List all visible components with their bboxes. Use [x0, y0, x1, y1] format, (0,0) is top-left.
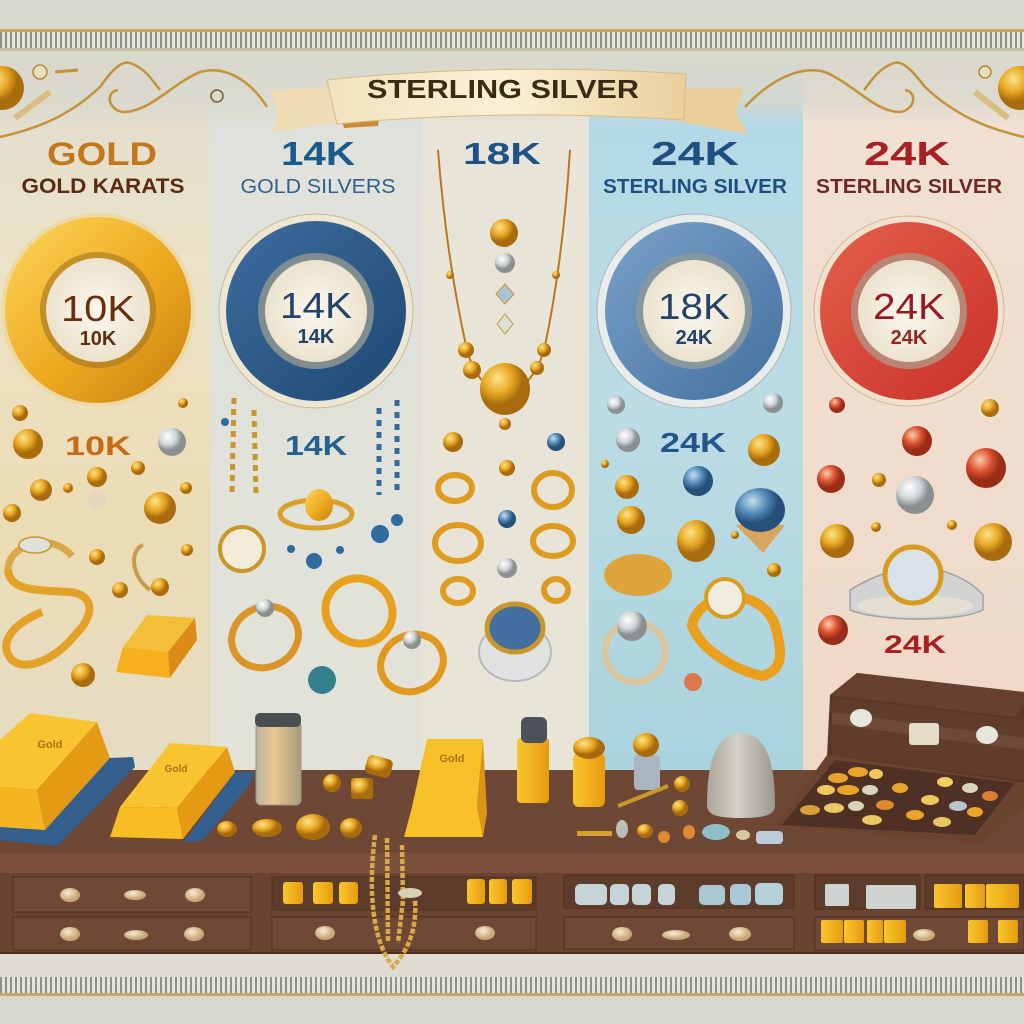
- heading: column 2: GOLD SILVERS: [240, 176, 396, 198]
- necklace: [438, 150, 570, 430]
- badge: 24K: [814, 216, 1004, 406]
- heading: column 4: STERLING SILVER: [603, 176, 788, 198]
- label: 10K: 10K: [65, 431, 132, 461]
- heading: column 1: [22, 136, 184, 198]
- badge: 14K: 14K: [298, 326, 335, 348]
- panel: column backgrounds: [0, 50, 1024, 770]
- heading: column 1: GOLD: [47, 136, 157, 172]
- gold bar: second: Gold: [165, 764, 187, 775]
- gold bar: center: Gold: [439, 753, 465, 765]
- small gems on counter: [577, 776, 783, 844]
- heading: column 1: GOLD KARATS: [22, 175, 184, 198]
- heading: column 3: 18K: [463, 136, 542, 171]
- badge: 18K 24K: 24K: [676, 327, 713, 349]
- jewelry: column 4: [598, 393, 785, 691]
- badge: 18K 24K: 18K: [658, 286, 730, 327]
- gold bar: second: [110, 743, 255, 843]
- gold bar: left: Gold: [37, 739, 63, 751]
- jewelry: column 2: [220, 398, 453, 702]
- counter: display shelf: [0, 770, 1024, 954]
- label: column 5 24K: 24K: [884, 631, 946, 659]
- hanging chain: [372, 835, 422, 967]
- heading: column 2: [240, 135, 396, 198]
- jewelry case: [777, 673, 1024, 843]
- jewelry: column 5: [817, 397, 1012, 645]
- heading: column 5: [816, 135, 1003, 198]
- label: column 4 24K: 24K: [660, 427, 726, 458]
- badge: 24K: 24K: [891, 327, 928, 349]
- jewelry: column 3: [435, 432, 573, 681]
- badge: 10K: [1, 213, 195, 407]
- drawers: far right: [815, 875, 1024, 950]
- heading: column 4: [603, 135, 788, 198]
- gold nuggets on counter: [217, 754, 394, 840]
- heading: column 5: 24K: [864, 135, 950, 172]
- jewelry: column 1: [3, 398, 197, 687]
- label: 14K: 14K: [285, 430, 347, 461]
- gold bar: left: [0, 713, 135, 846]
- gold bar: center: [404, 739, 487, 837]
- badge: 10K: 10K: [80, 328, 117, 350]
- badge: 18K 24K: [597, 214, 791, 408]
- bottles: [517, 717, 660, 807]
- bottom frame band: [0, 954, 1024, 996]
- silver dome: [707, 733, 775, 818]
- icon: right ornament: [745, 62, 1024, 137]
- banner: sterling silver: [270, 69, 748, 134]
- drawers: right: [564, 875, 794, 949]
- drawers: left: [13, 877, 251, 950]
- badge: 14K: [219, 214, 413, 408]
- badge: 14K: 14K: [280, 285, 352, 326]
- icon: left ornament: [0, 62, 267, 137]
- heading: column 4: 24K: [651, 135, 739, 172]
- top frame band: [0, 29, 1024, 51]
- heading: column 5: STERLING SILVER: [816, 176, 1003, 198]
- badge: 24K: 24K: [873, 286, 945, 327]
- heading: column 2: 14K: [281, 135, 355, 172]
- drawers: center: [272, 877, 536, 950]
- jar: silver: [255, 713, 301, 805]
- banner: sterling silver: STERLING SILVER: [367, 74, 639, 104]
- badge: 10K: 10K: [61, 288, 135, 329]
